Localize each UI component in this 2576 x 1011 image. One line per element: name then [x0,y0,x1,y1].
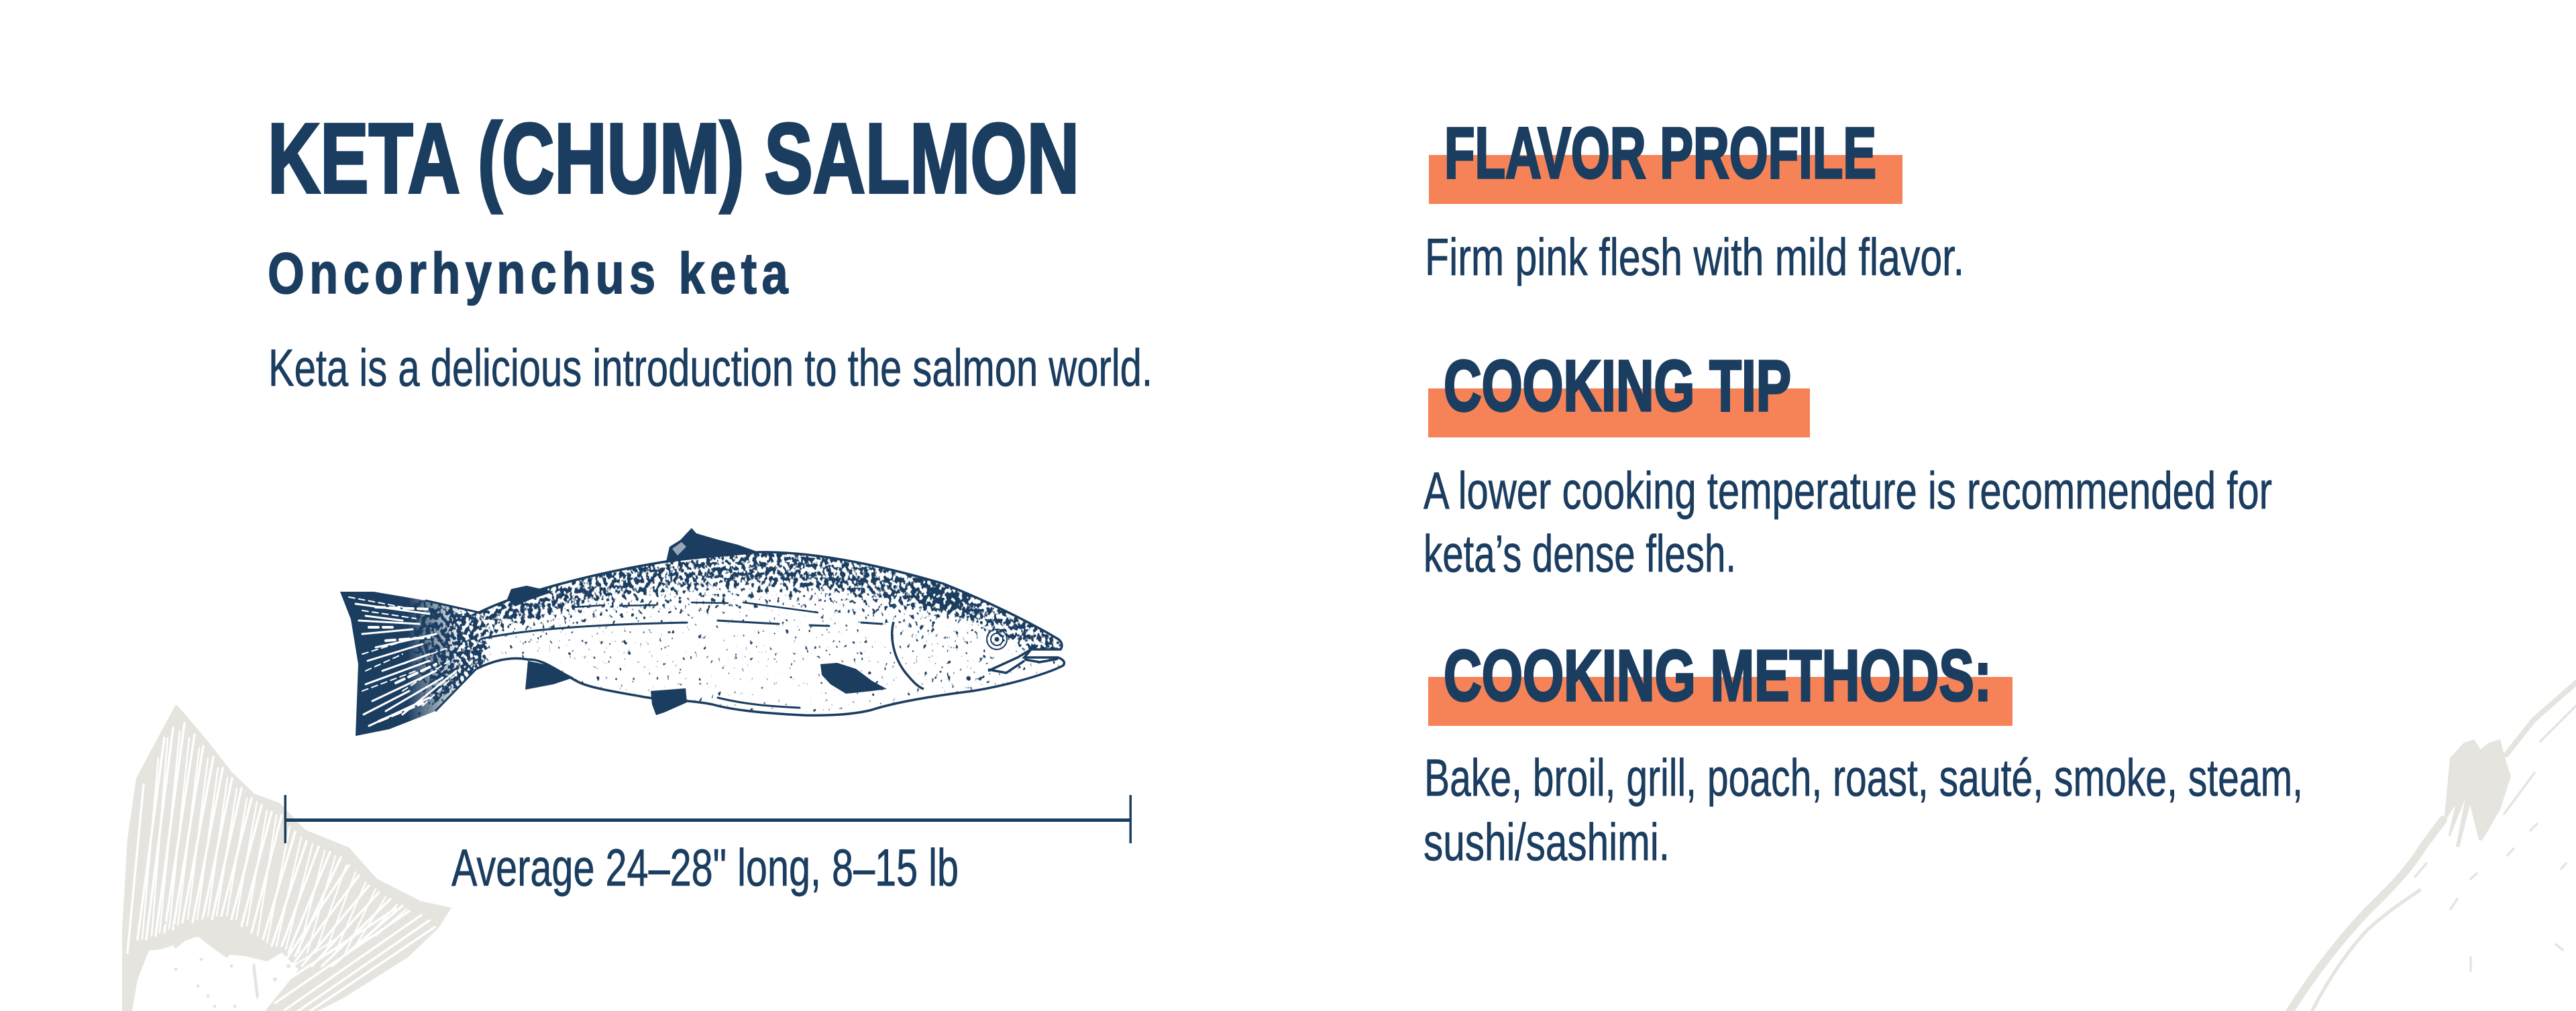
pectoral fin [820,663,887,694]
pelvic fin [651,688,687,715]
panel: flavor profile: Firm pink flesh with mild flavor. [1425,227,1964,286]
panel: cooking tip: keta’s dense flesh. [1424,524,1736,583]
adipose fin [507,586,553,606]
panel: cooking methods: sushi/sashimi. [1424,812,1670,871]
stipple texture [480,553,1061,714]
title: KETA (CHUM) SALMON [268,103,1079,214]
decorative salmon tail, bottom left [122,704,451,1011]
panel: cooking methods: COOKING METHODS: [1444,635,1992,716]
length ruler [284,795,1132,843]
panel: flavor profile: FLAVOR PROFILE [1444,112,1876,193]
size caption: Average 24–28" long, 8–15 lb [451,838,959,897]
mouth [988,649,1058,673]
panel: flavor profile [1425,112,1964,286]
panel: cooking tip: COOKING TIP [1444,345,1791,426]
eye [987,629,1007,649]
decorative salmon body outline, bottom right [2289,682,2576,1011]
intro text: Keta is a delicious introduction to the salmon world. [268,338,1152,397]
panel: cooking tip: A lower cooking temperature is recommended for [1424,461,2272,520]
salmon illustration [340,528,1065,736]
body outline [476,552,1064,715]
anal fin [525,661,574,690]
lateral lines [482,602,882,708]
gill cover [892,622,924,689]
panel: cooking tip [1424,345,2272,583]
dorsal fin [666,528,759,562]
tail fin [340,592,490,736]
scientific name: Oncorhynchus keta [268,242,793,306]
panel: cooking methods [1424,635,2303,871]
